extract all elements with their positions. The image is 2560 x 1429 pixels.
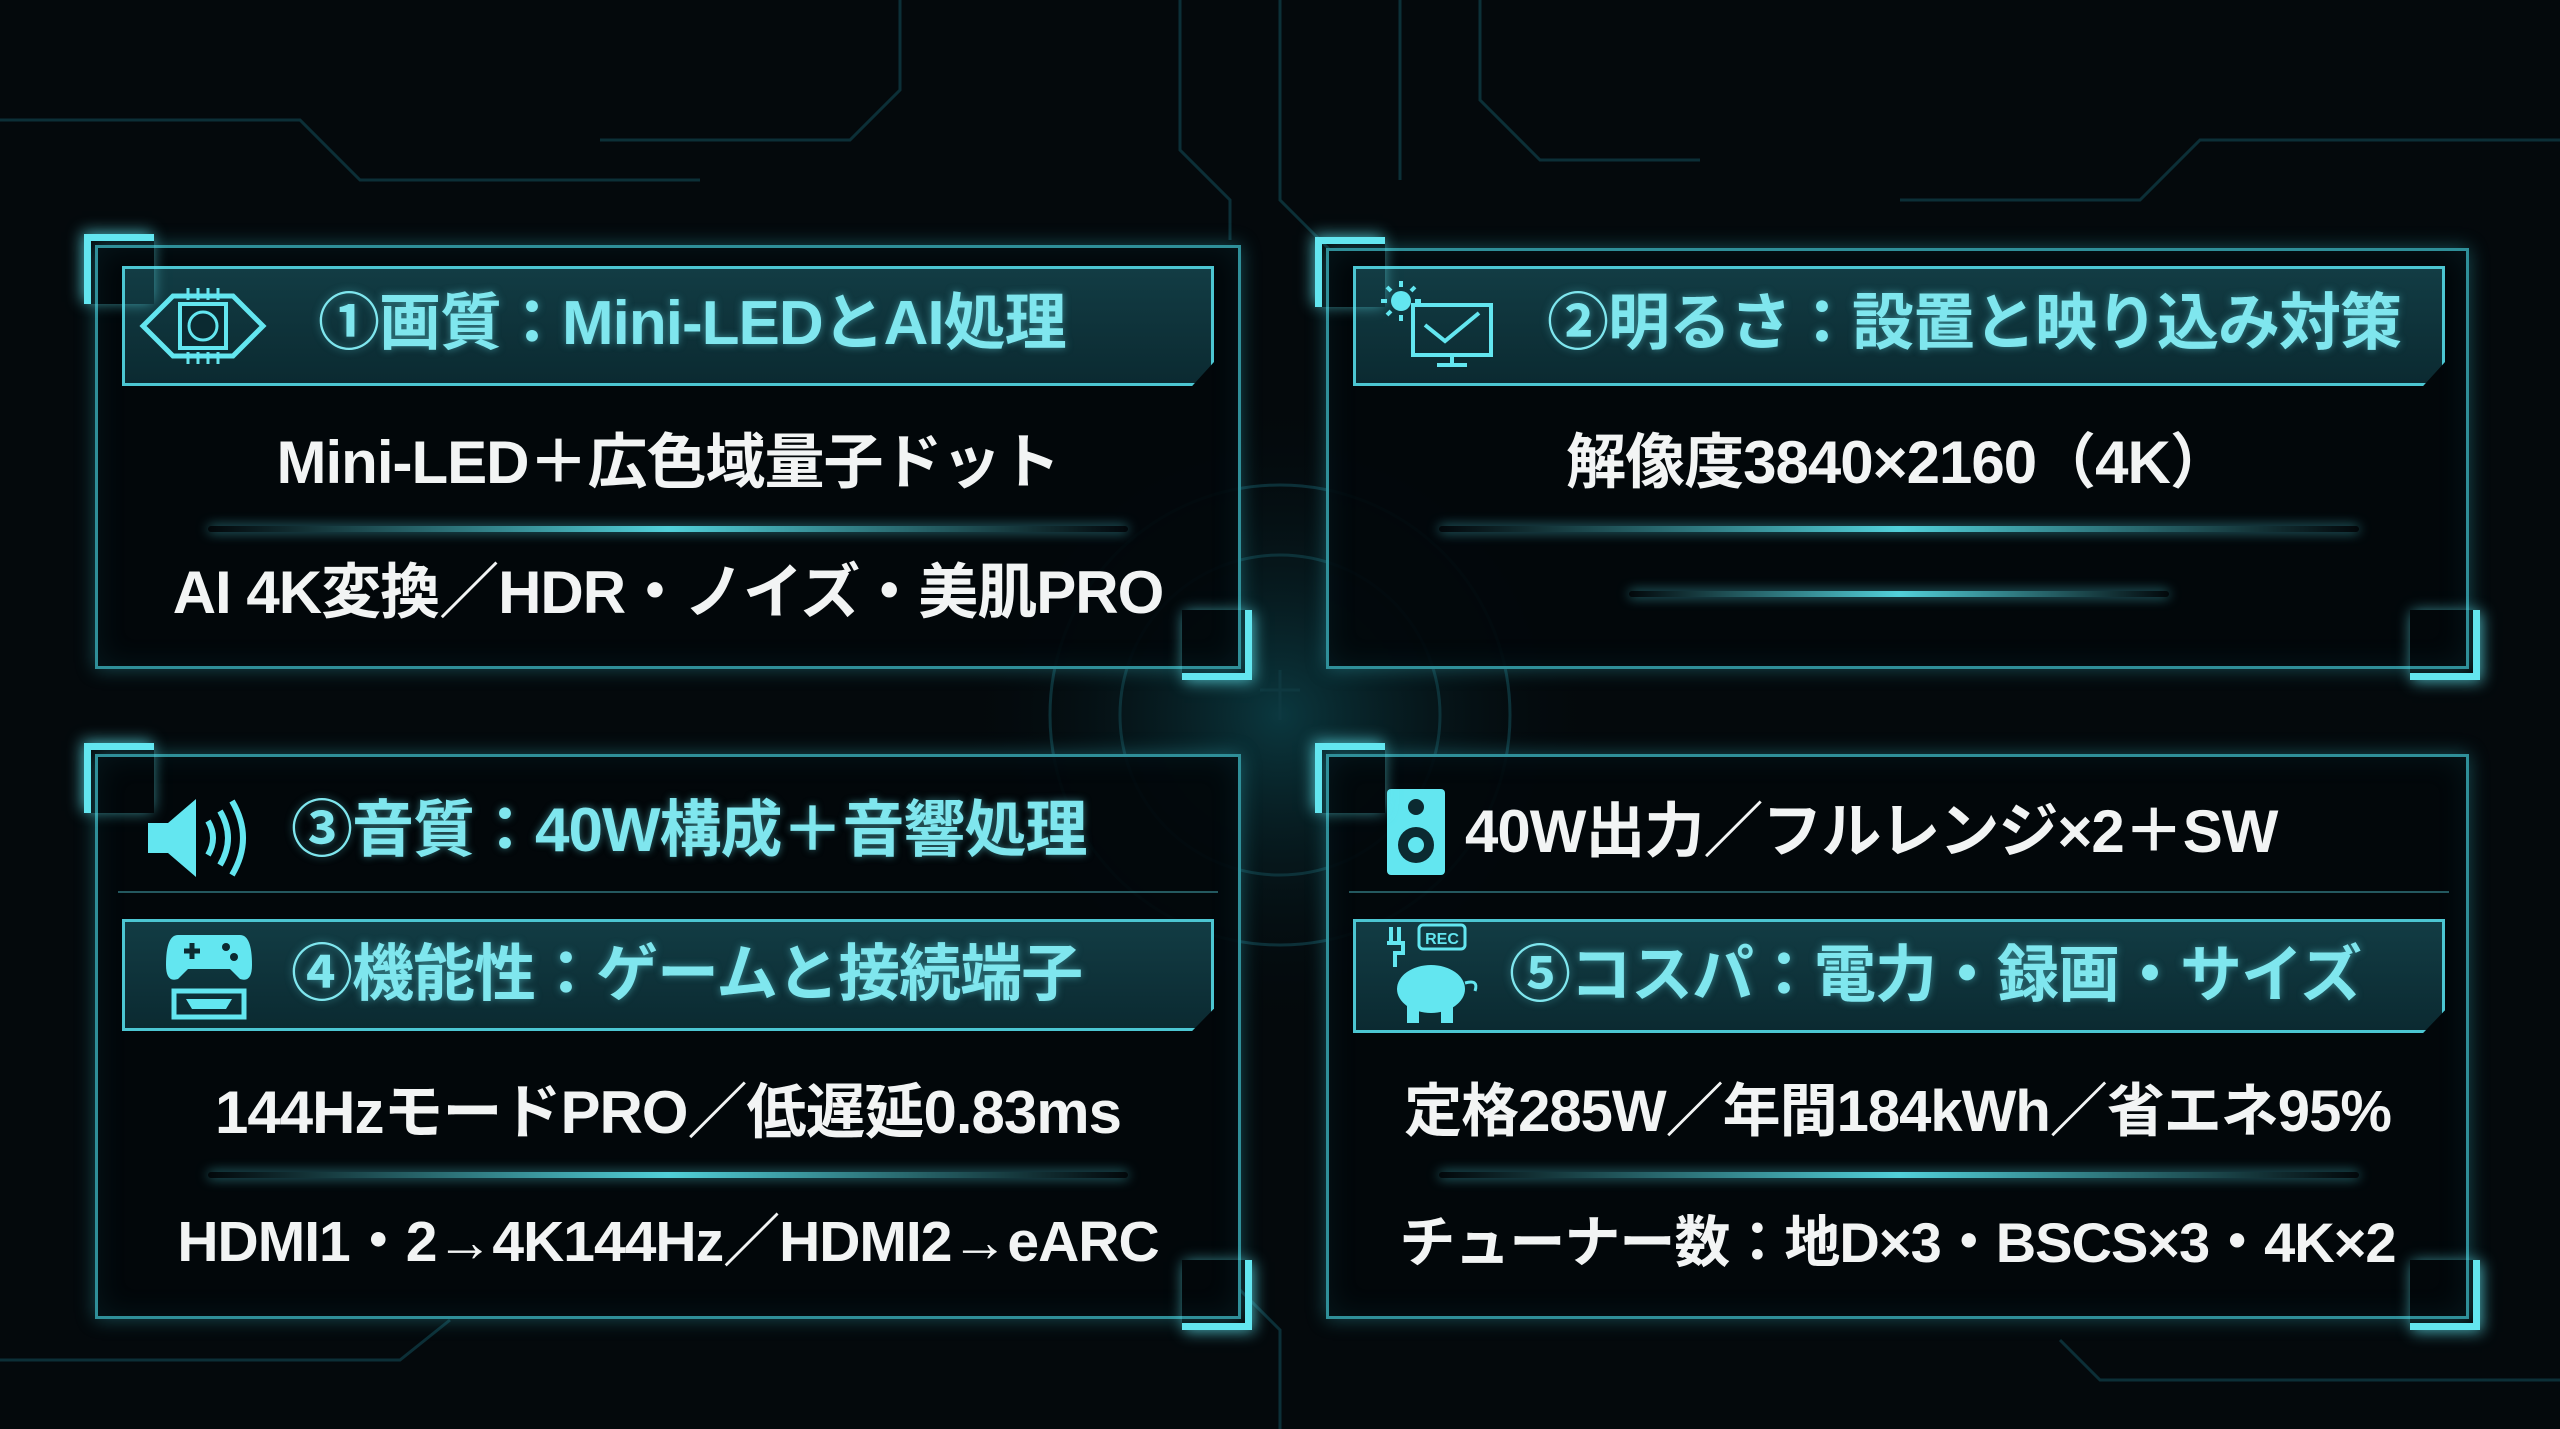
icon: piggy bank with plug and REC: REC (1425, 931, 1459, 948)
icon: speaker (148, 799, 246, 877)
panel 3: sound and function (95, 754, 1241, 1319)
icon: AI chip eye (140, 288, 266, 364)
header bar 1 (122, 266, 1214, 386)
header bar 2 (1353, 266, 2445, 386)
icon: sun and screen (1381, 281, 1493, 367)
header bar 4 (122, 919, 1214, 1031)
text: HDMI: HDMI1・2→4K144Hz／HDMI2→eARC (177, 1210, 1159, 1274)
header text 5: ⑤コスパ：電力・録画・サイズ (1509, 941, 2361, 1010)
panel 4: output and cost (1326, 754, 2469, 1319)
header text 2: ②明るさ：設置と映り込み対策 (1547, 289, 2401, 358)
panel 2: brightness (1326, 248, 2469, 669)
text: Mini-LED: Mini-LED＋広色域量子ドット (277, 429, 1059, 496)
text: 40W output: 40W出力／フルレンジ×2＋SW (1465, 798, 2277, 865)
text: power: 定格285W／年間184kWh／省エネ95% (1404, 1079, 2391, 1144)
text: 144Hz: 144HzモードPRO／低遅延0.83ms (215, 1079, 1121, 1146)
header text 4: ④機能性：ゲームと接続端子 (291, 940, 1082, 1009)
header text 1: ①画質：Mini-LEDとAI処理 (318, 289, 1066, 358)
text: resolution: 解像度3840×2160（4K） (1566, 429, 2229, 496)
icon: speaker box (1387, 789, 1445, 875)
heading: sound: ③音質：40W構成＋音響処理 (291, 796, 1086, 865)
text: AI 4K: AI 4K変換／HDR・ノイズ・美肌PRO (173, 559, 1163, 626)
icon: piggy bank with plug and REC (1387, 924, 1478, 1023)
header bar 5 (1353, 919, 2445, 1033)
panel 1: picture quality (95, 245, 1241, 669)
text: tuners: チューナー数：地D×3・BSCS×3・4K×2 (1399, 1211, 2396, 1274)
icon: gamepad (166, 935, 252, 1020)
